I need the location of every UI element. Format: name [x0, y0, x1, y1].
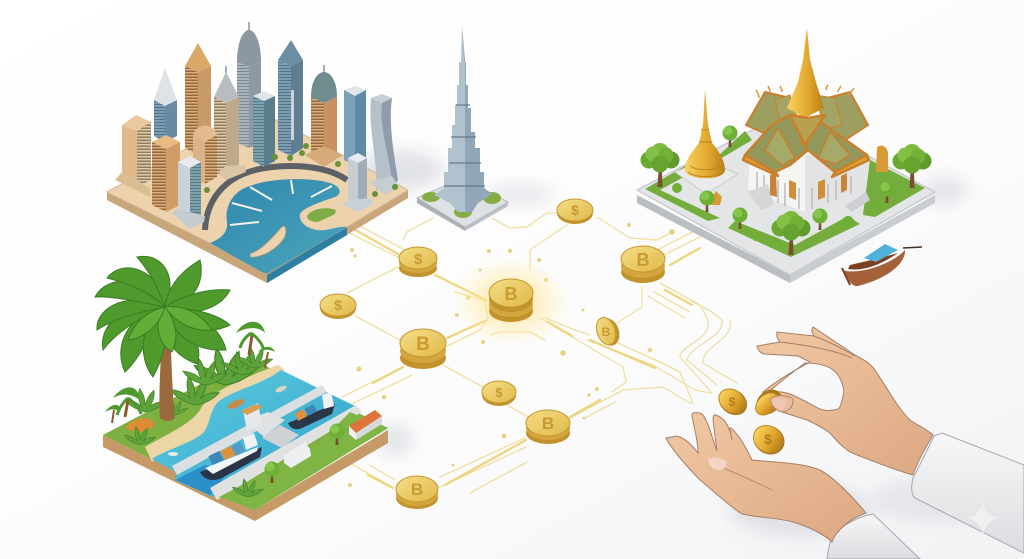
- coin: stack south: B: [411, 480, 423, 499]
- container ship large: [200, 433, 262, 480]
- coin: upright edge-on: B: [602, 325, 611, 339]
- platform base: [107, 110, 408, 283]
- coin: stack west centre: [400, 329, 446, 369]
- icon: corner sparkle: [966, 501, 1000, 535]
- central glow: [449, 254, 573, 350]
- thumb tip over coin: [770, 396, 793, 412]
- tower: tan spire: [185, 43, 211, 155]
- coin: stack west centre: B: [416, 334, 430, 355]
- container ship small: [288, 392, 335, 429]
- coin: stack north west: $: [414, 251, 423, 268]
- golden statues: [711, 146, 888, 205]
- coin: stack north east: B: [636, 250, 650, 270]
- tower: cream with grey roof: [214, 66, 246, 180]
- coin: stack north west: [399, 247, 437, 277]
- coin: falling bottom: [748, 420, 790, 460]
- lawns: [645, 131, 925, 257]
- coin: stack south east: [526, 410, 570, 444]
- tower: tan arch: [193, 126, 217, 184]
- tower: orange tan: [152, 135, 180, 212]
- tower: back left pointed: [154, 68, 177, 142]
- panel: tall spire tower: [417, 25, 508, 231]
- coin: south centre: $: [495, 385, 503, 400]
- fronds: [95, 256, 230, 377]
- sand islet: [250, 226, 286, 257]
- tower: blue glass right: [344, 86, 366, 165]
- large palm tree: [95, 256, 230, 421]
- main temple back roofs: [746, 85, 868, 140]
- coin: falling left: $: [729, 395, 736, 409]
- coin: stack north east: [621, 246, 665, 283]
- small golden stupa: [675, 90, 738, 194]
- coin: stack south east: B: [542, 414, 554, 433]
- coin: falling bottom: $: [764, 431, 772, 447]
- thumbnail lower: [708, 458, 727, 470]
- tower: teal slab: [253, 91, 275, 167]
- network node dots: [348, 223, 694, 487]
- tower: front left tan: [115, 115, 151, 197]
- garden islet: [300, 204, 345, 229]
- panel: tropical canal island: [95, 256, 388, 521]
- coin: west: $: [334, 297, 342, 313]
- coin: south centre: [482, 381, 516, 406]
- island base: [103, 358, 388, 521]
- temple trees: [640, 126, 932, 255]
- trunk: [159, 315, 175, 421]
- panel: Thai temple platform: [637, 28, 935, 283]
- main temple front roofs: [743, 115, 869, 177]
- central golden spire: [787, 28, 824, 118]
- beach: [145, 365, 285, 462]
- coin: north: [557, 199, 593, 224]
- platform: [637, 112, 935, 283]
- small palms: [204, 143, 398, 197]
- coin: central bitcoin stack: [489, 279, 533, 322]
- coin: held between fingers: [751, 384, 787, 420]
- thumbnail upper: [772, 398, 787, 410]
- sleeve: lower arm: [827, 514, 920, 559]
- tower: white and teal: [172, 156, 205, 229]
- icon: long-tail boat: [842, 244, 922, 286]
- coin: upright edge-on: [593, 315, 623, 348]
- road: [205, 166, 347, 230]
- tower: white front right: [342, 153, 373, 212]
- tower body: [434, 25, 492, 212]
- coin: north: $: [571, 202, 579, 218]
- tower: silver spire: [237, 22, 261, 148]
- panel: marina city platform: [107, 22, 408, 283]
- highlighted gold data streams: [352, 228, 700, 488]
- panel: hands exchanging coins: [666, 327, 1024, 559]
- road and lock walls: [172, 385, 362, 500]
- small palms: [105, 322, 275, 423]
- sleeve: upper arm: [912, 433, 1024, 553]
- piers: [230, 180, 332, 225]
- small trees on the lawn: [233, 424, 344, 497]
- main temple walls: [748, 150, 870, 212]
- tower: twisted silver: [370, 94, 398, 195]
- small boats: [168, 384, 287, 456]
- upper hand finger creases: [780, 336, 855, 358]
- tower: gold and blue dome: [305, 65, 343, 167]
- coin: central bitcoin stack: B: [504, 284, 518, 304]
- shrubs: [125, 347, 273, 445]
- lower hand crease: [708, 462, 772, 490]
- lower hand: [666, 413, 866, 542]
- lower lawn: [219, 449, 321, 510]
- coin: west: [320, 294, 356, 319]
- coin: falling left: [714, 384, 752, 420]
- connection network lines: [342, 213, 737, 493]
- coin: stack south: [396, 476, 438, 509]
- warehouse and truck: [284, 410, 382, 468]
- tower: blue glass: [278, 40, 303, 156]
- soft ground shadows: [356, 150, 1010, 536]
- upper hand: [757, 327, 933, 475]
- tower plinth: [417, 178, 508, 231]
- canal water: [152, 370, 357, 497]
- marina water: [210, 179, 347, 273]
